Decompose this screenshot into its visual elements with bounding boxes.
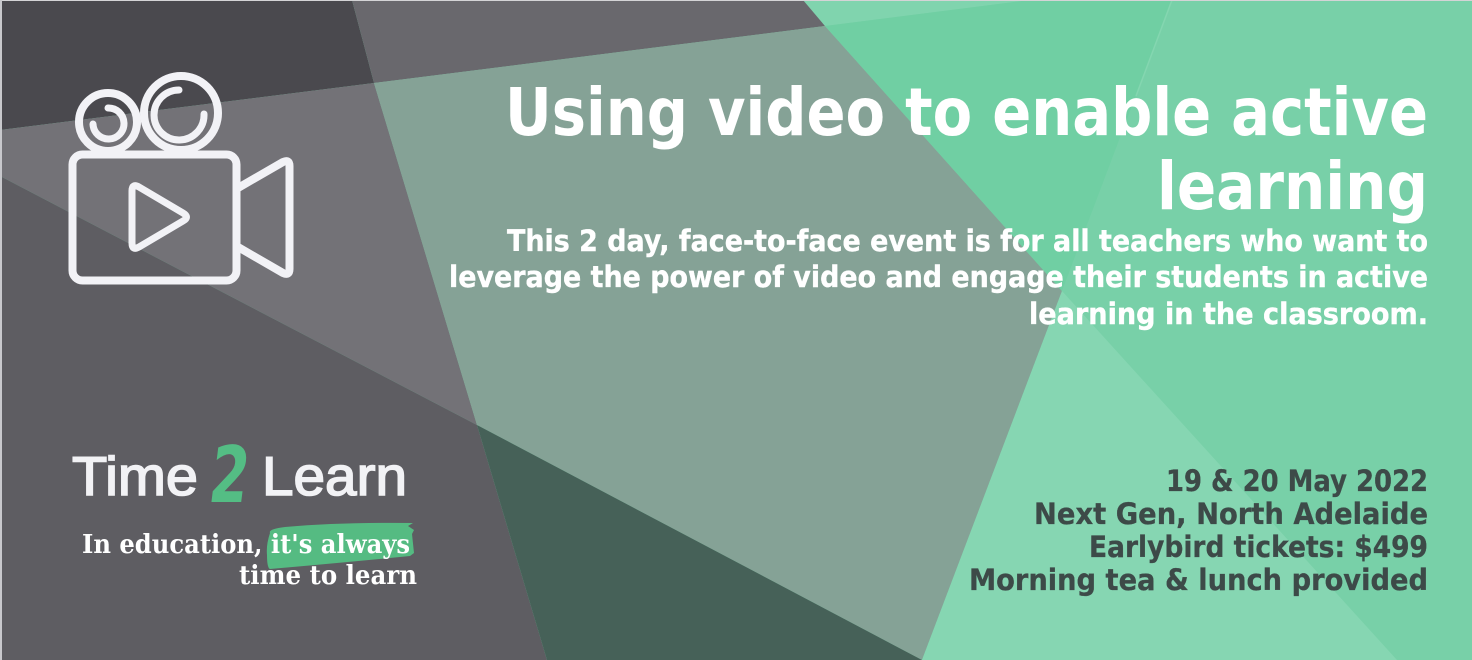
- event details: [969, 464, 1428, 597]
- logo: Time 2 Learn: [72, 431, 407, 521]
- logo: Time 2 Learn: Learn: [262, 445, 407, 507]
- subtitle: [449, 224, 1428, 331]
- tagline with green brush highlight: [82, 523, 417, 591]
- subtitle: learning in the classroom.: [1029, 297, 1428, 331]
- event details: Earlybird tickets: $499: [1089, 530, 1428, 564]
- tagline with green brush highlight: In education, it's always: [82, 530, 410, 560]
- event details: 19 & 20 May 2022: [1166, 464, 1428, 498]
- tagline with green brush highlight: time to learn: [239, 561, 417, 591]
- event details: Morning tea & lunch provided: [969, 563, 1428, 597]
- event details: Next Gen, North Adelaide: [1034, 497, 1428, 531]
- title: learning: [1157, 148, 1428, 225]
- logo: Time 2 Learn: 2: [205, 431, 255, 521]
- logo: Time 2 Learn: Time: [72, 445, 198, 507]
- icon: video camera: [72, 76, 290, 280]
- title: [505, 74, 1428, 225]
